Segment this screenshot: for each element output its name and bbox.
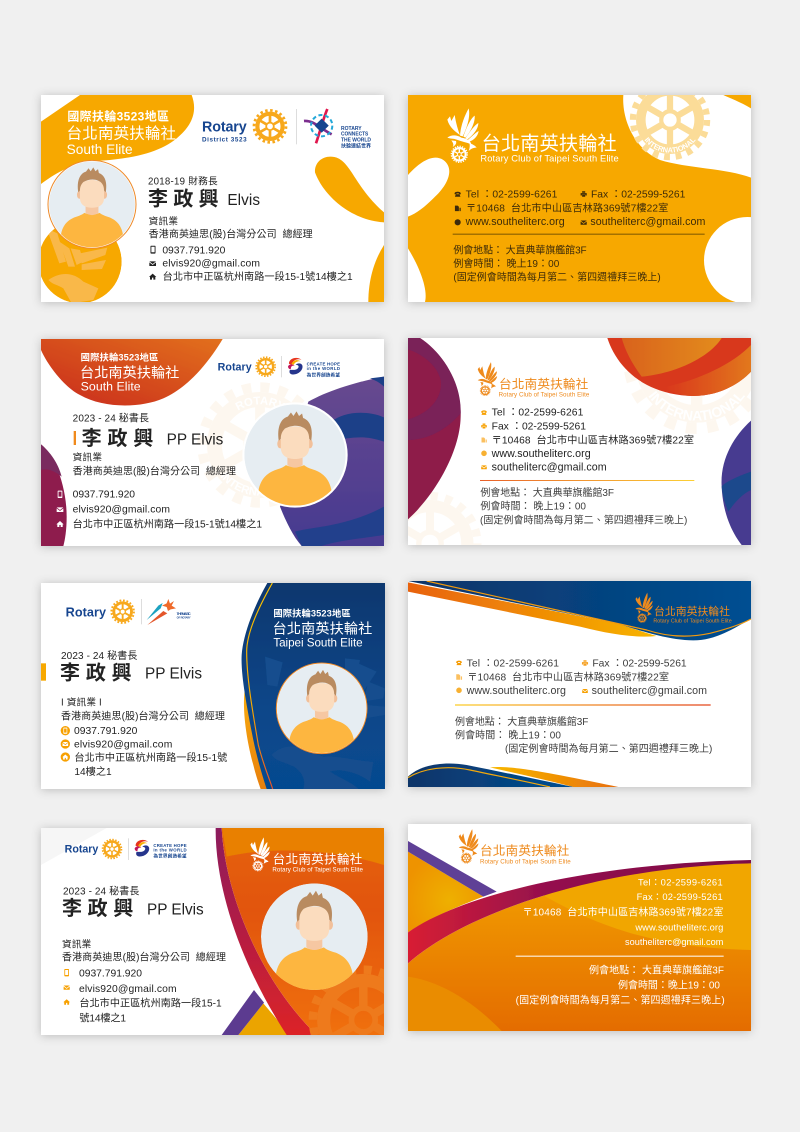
contact details: 0937.791.920: [79, 969, 142, 980]
purple right shape: [280, 377, 384, 546]
portrait: [276, 663, 367, 754]
contact details: www.southeliterc.org: [491, 448, 591, 460]
club logo: 台北南英扶輪社: [482, 133, 617, 155]
meeting info: 例會地點： 大直典華旗艦館3F: [480, 486, 614, 499]
header text: 國際扶輪3523地區: [67, 109, 169, 124]
club logo: 台北南英扶輪社: [499, 376, 589, 391]
bottom right blob: [368, 245, 384, 302]
right drop blob: [315, 157, 384, 222]
rotary logo: Rotary: [65, 843, 98, 855]
contact details: Fax ：02-2599-5261: [592, 659, 687, 670]
meeting info: [455, 715, 712, 755]
contact details: Tel ：02-2599-6261: [467, 659, 559, 670]
name and title: Elvis: [227, 192, 260, 209]
rotary wheel watermark: INTERNATIONAL: [644, 137, 696, 153]
orange panel: [222, 828, 384, 1035]
contact details: www.southeliterc.org: [466, 685, 566, 697]
meeting info: [516, 963, 725, 1007]
rotary connects the world logo: [304, 109, 371, 150]
rotary logo: [202, 109, 297, 144]
club logo: [250, 837, 364, 874]
contact details: [149, 245, 353, 283]
magic of rotary logo: [147, 599, 191, 625]
meeting info: 例會地點： 大直典華旗艦館3F: [455, 715, 588, 728]
divider: [455, 704, 711, 706]
purple band: [222, 990, 264, 1035]
contact details: 台北市中正區杭州南路一段15-1號: [74, 751, 227, 764]
header text: 國際扶輪3523地區: [81, 352, 158, 363]
create hope logo: CREATE HOPE: [307, 361, 340, 366]
name and title: 2023 - 24 秘書長: [61, 649, 137, 662]
rotary wheel watermark: ROTARY: [235, 396, 284, 410]
club logo: [478, 362, 590, 398]
company: [62, 938, 226, 963]
company: 資訊業: [149, 215, 178, 227]
company: 資訊業: [73, 452, 102, 464]
company: 香港商英迪思(股)台灣分公司 總經理: [149, 228, 313, 241]
header text: [80, 352, 179, 394]
meeting info: (固定例會時間為每月第二、第四週禮拜三晚上): [505, 742, 712, 755]
header text: South Elite: [67, 142, 133, 157]
company: [61, 697, 225, 722]
header blob: [41, 339, 223, 405]
portrait: [242, 402, 348, 508]
rotary logo: Rotary: [202, 120, 247, 136]
contact details: [456, 659, 707, 697]
magic of rotary logo: THE MAGIC: [177, 612, 191, 616]
club logo: Rotary Club of Taipei South Elite: [653, 618, 732, 624]
rotary connects the world logo: THE WORLD: [341, 138, 371, 144]
club logo: Rotary Club of Taipei South Elite: [480, 154, 619, 164]
name and title: 2023 - 24 秘書長: [73, 411, 149, 424]
contact details: 台北市中正區杭州南路一段15-1號14樓之1: [73, 517, 262, 530]
contact details: 14樓之1: [74, 765, 112, 778]
name and title: [73, 412, 223, 448]
main orange area: [408, 863, 751, 1031]
contact details: elvis920@gmail.com: [79, 984, 177, 995]
contact details: elvis920@gmail.com: [162, 258, 260, 269]
contact details: southeliterc@gmail.com: [625, 937, 724, 947]
right purple shape: [722, 421, 751, 545]
contact details: 號14樓之1: [79, 1012, 126, 1025]
rotary logo: Rotary: [66, 606, 106, 620]
name and title: [148, 176, 260, 211]
meeting info: 例會地點： 大直典華旗艦館3F: [453, 243, 587, 256]
purple band: [408, 841, 497, 897]
club logo: [447, 108, 619, 164]
meeting info: (固定例會時間為每月第二、第四週禮拜三晚上): [516, 994, 725, 1007]
header text: 台北南英扶輪社: [273, 620, 372, 637]
left gold triangle: [408, 852, 483, 932]
card 8: back, orange swoosh: [408, 824, 751, 1031]
club logo: Rotary Club of Taipei South Elite: [272, 867, 364, 874]
header text: Taipei South Elite: [273, 636, 363, 649]
rotary logo: Rotary: [218, 362, 252, 374]
company: [73, 452, 236, 477]
rotary wheel watermark: INTERNATIONAL: [221, 472, 259, 496]
card 7: front, orange and maroon: [41, 828, 414, 1070]
card 6: back, navy: [408, 581, 751, 787]
magenta bottom left shape: [41, 444, 67, 546]
rotary logo: District 3523: [202, 137, 247, 144]
faint top left swoosh: [41, 828, 107, 865]
contact details: 〒10468 台北市中山區吉林路369號7樓22室: [492, 433, 694, 446]
navy panel: [242, 583, 385, 789]
gold band: [408, 582, 657, 637]
club logo: 台北南英扶輪社: [480, 843, 570, 858]
navy top band: [408, 581, 751, 640]
wheel watermark: [313, 970, 414, 1070]
company: 香港商英迪思(股)台灣分公司 總經理: [61, 709, 225, 722]
gold corner: [238, 1003, 290, 1035]
maroon to red band: [216, 828, 317, 1035]
header text: 台北南英扶輪社: [80, 364, 179, 381]
header blob: [41, 95, 194, 184]
meeting info: 例會時間： 晚上19：00: [480, 500, 586, 513]
contact details: Tel：02-2599-6261: [638, 877, 723, 887]
meeting info: 例會時間： 晚上19：00: [453, 257, 560, 270]
card 2: back, orange: [404, 92, 756, 308]
club logo: [459, 829, 571, 866]
top right orange shape: [607, 338, 751, 396]
rotary logo: [218, 356, 282, 377]
name and title: 李 政 興: [82, 427, 153, 450]
contact details: [63, 969, 222, 1025]
contact details: 0937.791.920: [162, 245, 226, 256]
meeting info: 例會時間：晚上19：00: [618, 978, 720, 991]
contact details: 0937.791.920: [73, 490, 135, 501]
card 3: front, red and purple: [36, 336, 388, 552]
contact details: 〒10468 台北市中山區吉林路369號7樓22室: [467, 670, 669, 683]
club logo: 台北南英扶輪社: [273, 852, 363, 867]
contact details: southeliterc@gmail.com: [590, 216, 705, 228]
rotary wheel watermark top right: [624, 372, 751, 434]
create hope logo: in the WORLD: [153, 848, 187, 853]
meeting info: 例會地點： 大直典華旗艦館3F: [589, 963, 724, 976]
create hope logo: in the WORLD: [307, 366, 340, 371]
contact details: Fax：02-2599-5261: [637, 892, 723, 902]
meeting info: (固定例會時間為每月第二、第四週禮拜三晚上): [480, 513, 687, 526]
contact details: 台北市中正區杭州南路一段15-1: [79, 997, 222, 1010]
contact details: 台北市中正區杭州南路一段15-1號14樓之1: [163, 270, 353, 283]
rotary wheel watermark: [198, 382, 304, 508]
contact details: elvis920@gmail.com: [73, 504, 170, 515]
create hope logo: [288, 358, 340, 378]
contact details: www.southeliterc.org: [634, 922, 723, 932]
left magenta shape: [408, 338, 461, 519]
contact details: [481, 408, 694, 473]
contact details: southeliterc@gmail.com: [492, 461, 607, 473]
rotary logo: [66, 599, 142, 624]
divider: [453, 234, 705, 235]
contact details: Tel ：02-2599-6261: [466, 189, 558, 200]
club logo: 台北南英扶輪社: [654, 604, 730, 618]
rotary wheel watermark bottom left: [408, 492, 482, 545]
bottom swooshes: [408, 763, 618, 787]
name and title: 李 政 興: [148, 188, 219, 211]
contact details: www.southeliterc.org: [465, 216, 565, 228]
lighter top wave: [222, 828, 384, 865]
rotary connects the world logo: ROTARY: [341, 126, 362, 132]
name and title: 李 政 興: [60, 661, 132, 684]
name and title: 2023 - 24 秘書長: [63, 885, 139, 898]
rotary connects the world logo: CONNECTS: [341, 132, 369, 138]
create hope logo: [135, 840, 187, 860]
header text: 台北南英扶輪社: [67, 124, 176, 142]
create hope logo: CREATE HOPE: [153, 843, 187, 848]
name and title: [60, 649, 202, 684]
company: 香港商英迪思(股)台灣分公司 總經理: [73, 464, 236, 477]
contact details: Fax ：02-2599-5261: [591, 189, 686, 200]
portrait: [261, 883, 368, 990]
header text: [67, 109, 176, 157]
name and title: PP Elvis: [167, 431, 224, 448]
rotary connects the world logo: 扶輪連結世界: [341, 143, 371, 150]
meeting info: [453, 243, 661, 283]
contact details: southeliterc@gmail.com: [592, 685, 707, 697]
gold pinstripe: [427, 581, 751, 636]
contact details: [61, 726, 227, 778]
name and title: PP Elvis: [147, 902, 204, 919]
lighter wave upper right: [540, 863, 751, 950]
meeting info: [480, 486, 687, 526]
contact details: [455, 189, 705, 228]
header text: 國際扶輪3523地區: [273, 608, 351, 619]
contact details: 〒10468 台北市中山區吉林路369號7樓22室: [466, 201, 668, 214]
magic of rotary logo: OF ROTARY: [177, 616, 191, 620]
club logo: Rotary Club of Taipei South Elite: [499, 391, 590, 398]
gold pinstripe: [247, 583, 273, 789]
lighter wave lower left: [408, 977, 502, 1031]
contact details: 〒10468 台北市中山區吉林路369號7樓22室: [523, 905, 723, 918]
club logo: [635, 593, 732, 624]
maroon swoosh: [408, 860, 751, 963]
card 4: back, red and purple: [404, 334, 756, 550]
lower right white circle: [704, 217, 751, 302]
portrait: [48, 160, 136, 248]
company: [149, 215, 313, 241]
company: 香港商英迪思(股)台灣分公司 總經理: [62, 950, 226, 963]
contact details: Fax ：02-2599-5261: [492, 421, 586, 432]
accent bar: [41, 663, 46, 681]
header text: South Elite: [81, 380, 141, 394]
meeting info: 例會時間： 晚上19：00: [455, 729, 561, 742]
contact details: [56, 490, 262, 530]
name and title: [62, 885, 204, 920]
name and title: PP Elvis: [145, 666, 202, 683]
contact details: elvis920@gmail.com: [74, 740, 172, 751]
left white blob: [408, 158, 449, 217]
gold rail: [244, 688, 270, 789]
card 1: front, orange blobs: [38, 95, 384, 303]
create hope logo: 為世界創造希望: [153, 853, 187, 860]
contact details: [523, 877, 724, 947]
lower left white blob: [408, 248, 426, 302]
contact details: 0937.791.920: [74, 726, 138, 737]
card 5: front, navy: [41, 583, 385, 789]
bottom left circle with eagle watermark: [41, 228, 122, 302]
eagle watermark: [265, 657, 385, 789]
contact details: Tel ：02-2599-6261: [492, 408, 584, 419]
rotary wheel watermark top right: INTERNATIONAL: [648, 391, 745, 420]
header text: [273, 608, 372, 649]
company: 資訊業: [62, 938, 92, 950]
divider: [480, 480, 694, 481]
rotary logo: [65, 838, 129, 860]
rotary wheel watermark: [630, 95, 710, 160]
create hope logo: 為世界創造希望: [307, 371, 340, 378]
name and title: 李 政 興: [62, 897, 133, 920]
meeting info: (固定例會時間為每月第二、第四週禮拜三晚上): [453, 270, 661, 283]
white top right blob: [623, 95, 751, 178]
club logo: Rotary Club of Taipei South Elite: [480, 859, 571, 866]
name and title: 2018-19 財務長: [148, 176, 218, 188]
company: I 資訊業 I: [61, 697, 102, 709]
divider: [516, 955, 724, 958]
